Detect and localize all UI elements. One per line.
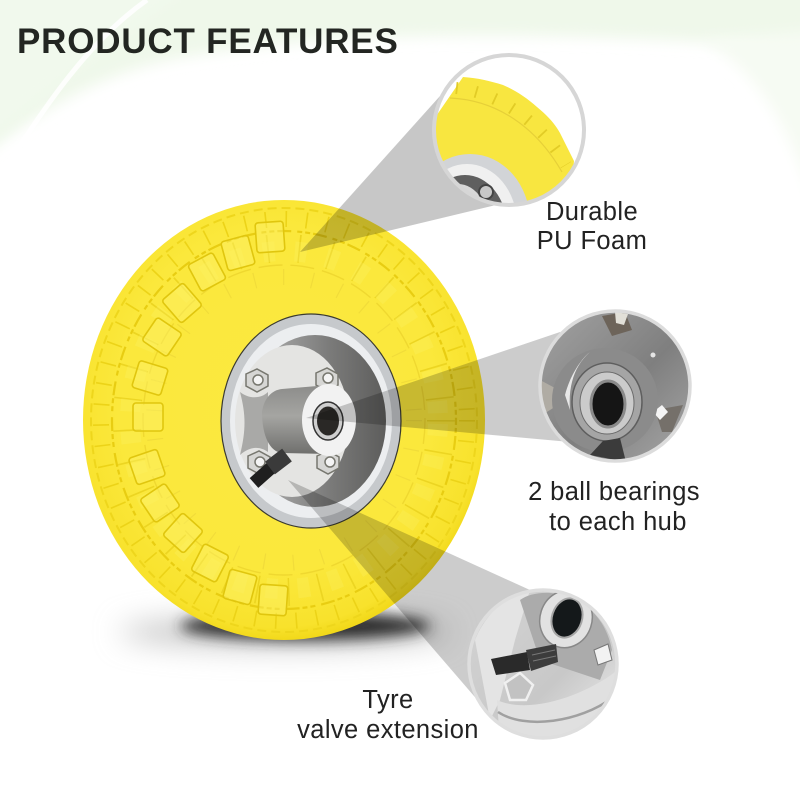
label: Durable PU Foam: PU Foam — [537, 227, 647, 255]
label: Tyre valve extension: Tyre — [362, 686, 414, 714]
title: PRODUCT FEATURES — [17, 22, 399, 61]
zoom circle: PU foam — [432, 53, 586, 207]
axle end and bearing — [302, 384, 356, 456]
label: Tyre valve extension: valve extension — [297, 716, 479, 744]
label: 2 ball bearings to each hub: to each hub — [549, 508, 687, 536]
label: 2 ball bearings to each hub — [528, 478, 700, 536]
zoom circle: ball bearings — [539, 310, 691, 462]
wheel hub — [221, 314, 401, 528]
callout cones — [288, 96, 615, 703]
label: 2 ball bearings to each hub: 2 ball bearings — [528, 478, 700, 506]
axle cylinder — [262, 385, 329, 454]
cone: valve — [288, 480, 543, 703]
bolts — [246, 368, 339, 474]
tread: raised blocks on left side — [128, 221, 288, 616]
label: Tyre valve extension — [297, 686, 479, 744]
valve stem — [254, 455, 287, 483]
label: Durable PU Foam — [537, 198, 647, 255]
ground shadow under wheel — [120, 612, 450, 648]
tread: grooves and blocks — [91, 208, 477, 632]
cone: bearings — [306, 332, 615, 442]
zoom circle: valve extension — [468, 583, 618, 745]
label: Durable PU Foam: Durable — [546, 198, 638, 226]
yellow tyre — [83, 200, 485, 640]
cone: PU foam — [300, 96, 509, 252]
